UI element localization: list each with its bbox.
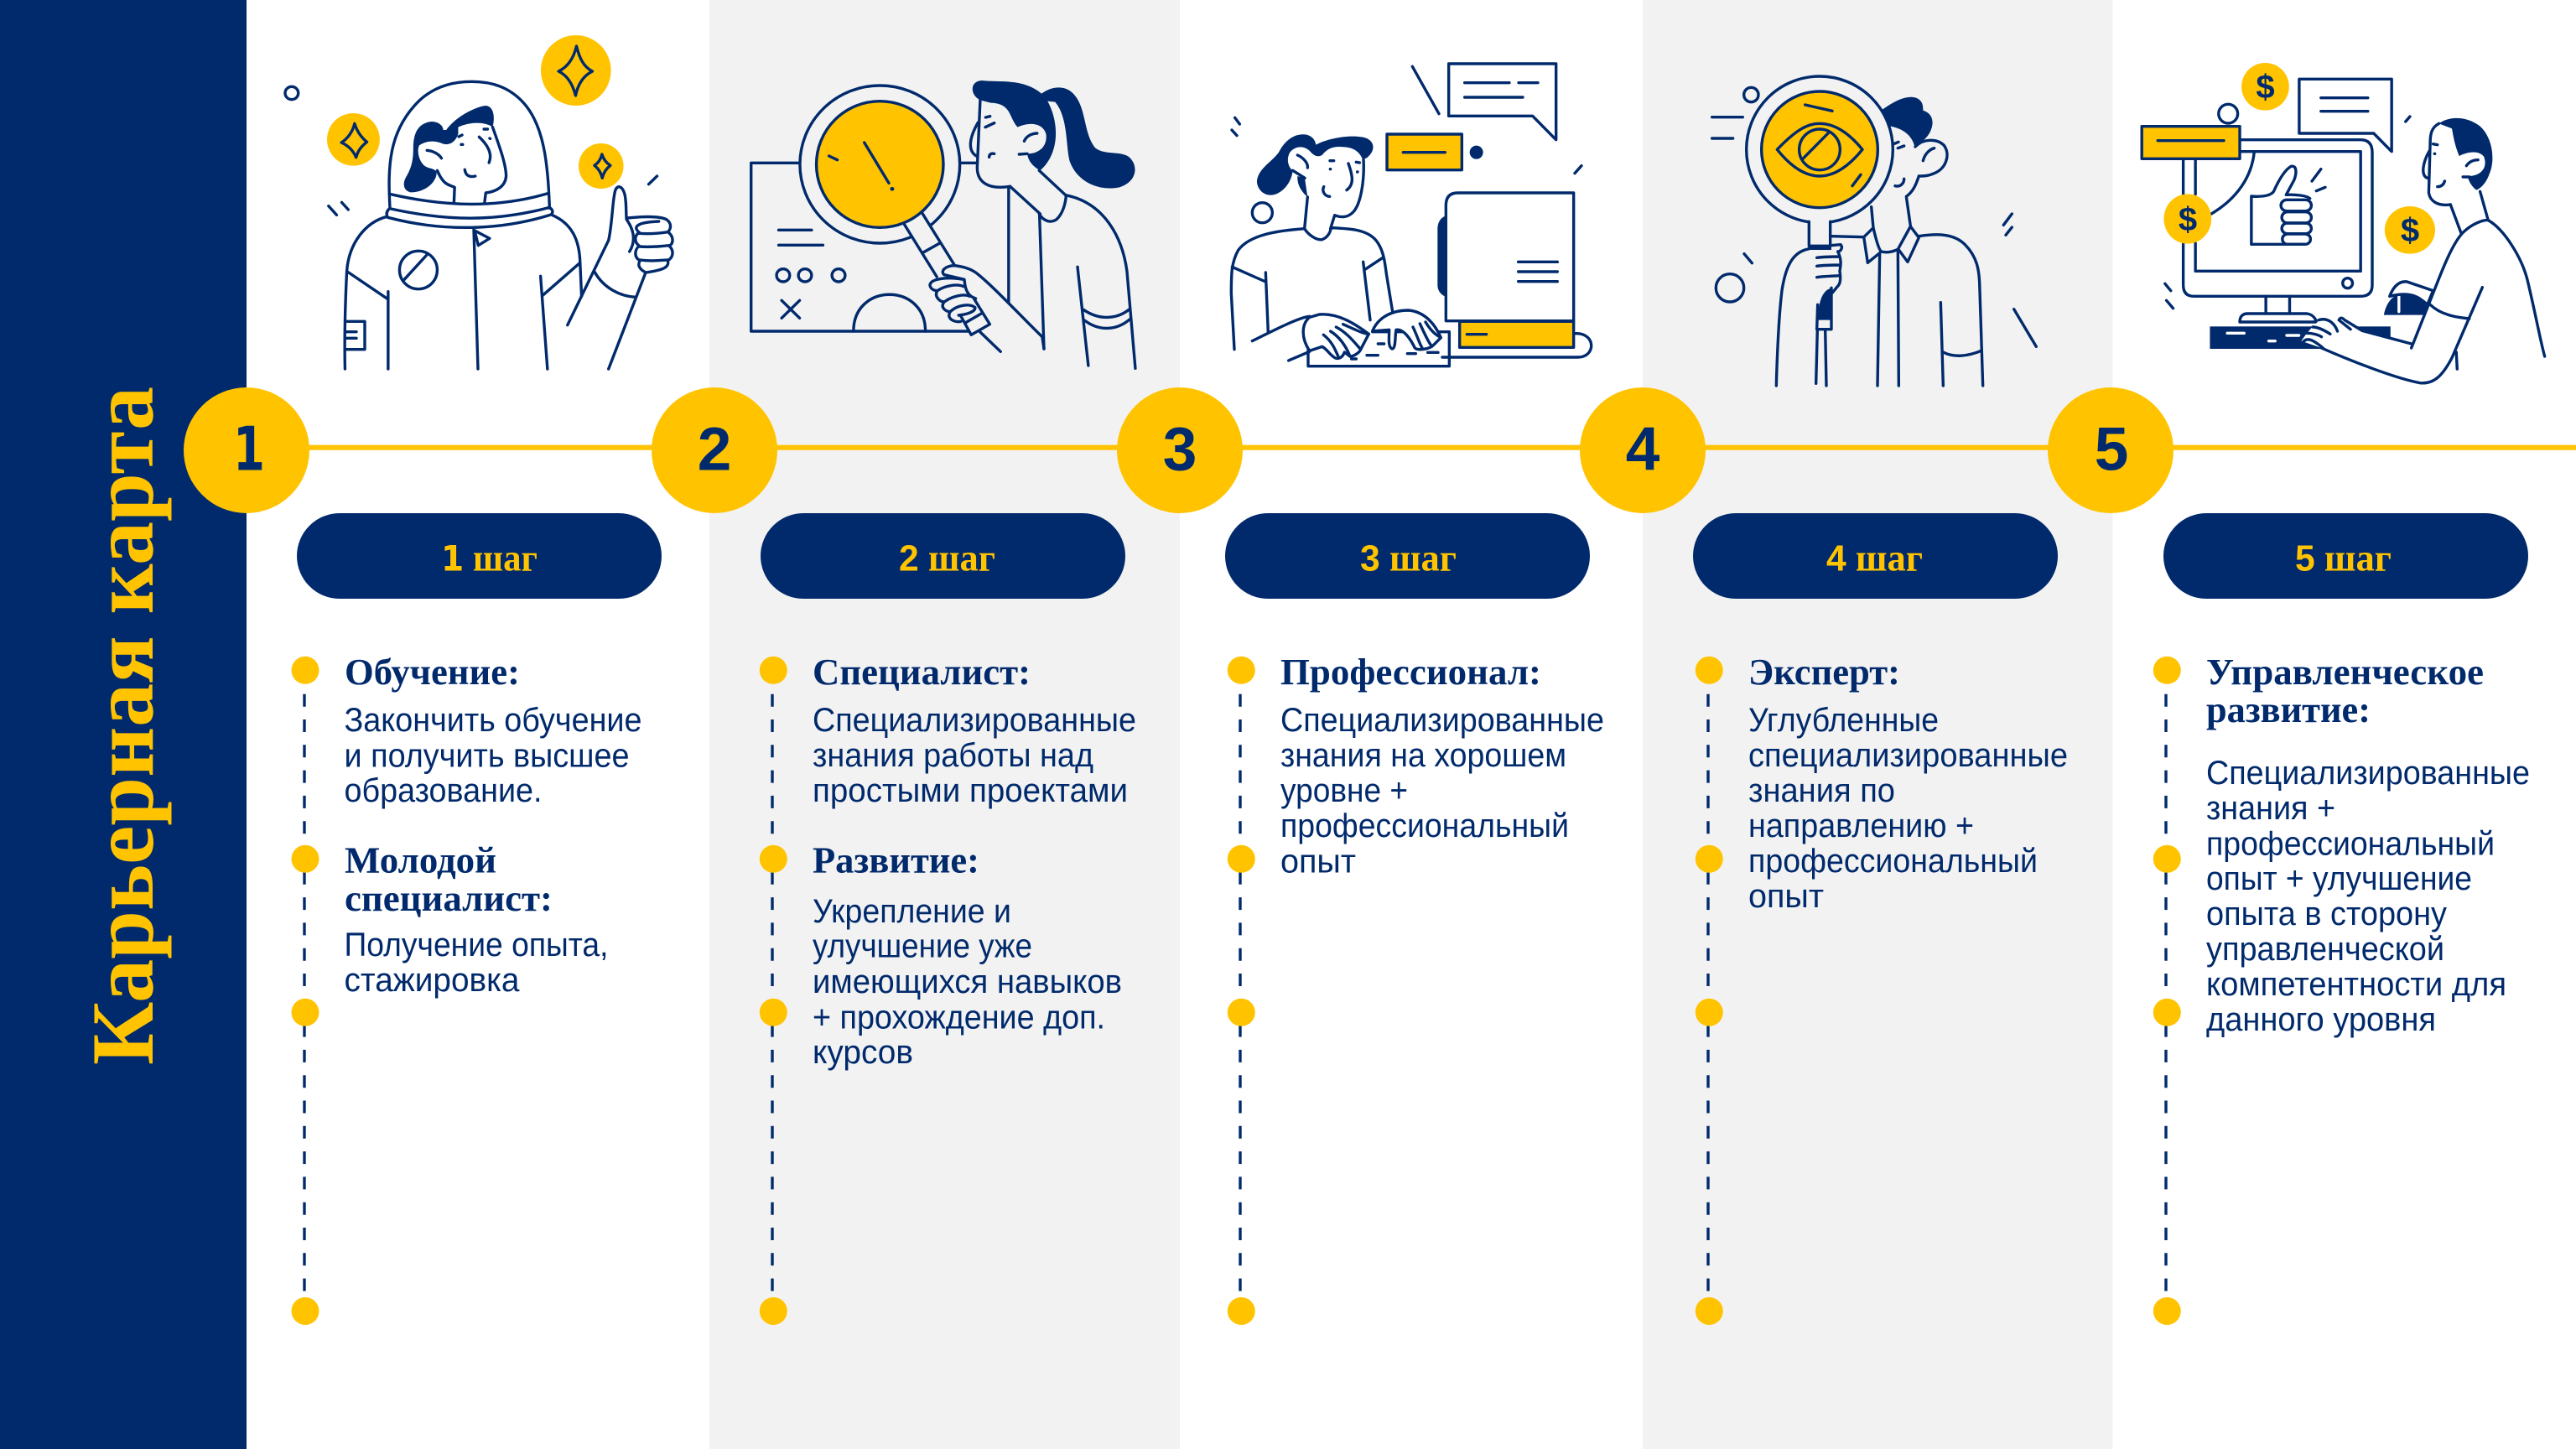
illustration: person at a computer [1231, 64, 1592, 366]
text block: step 5: компетентности для [2206, 966, 2506, 1003]
panel: step 2 background [709, 0, 1180, 1449]
timeline: 1 [233, 414, 265, 485]
text block: step 1: Получение опыта, [344, 927, 609, 963]
text block: step 5 [2206, 652, 2530, 1038]
text block: step 4: знания по [1748, 772, 1895, 809]
text block: step 2: простыми проектами [813, 772, 1128, 809]
step pill 2: 2 шаг [899, 537, 995, 579]
text block: step 2: улучшение уже [813, 928, 1032, 965]
text block: step 5: опыта в сторону [2206, 896, 2447, 932]
text block: step 1 [344, 652, 642, 999]
illustration: man at monitor with money [2142, 63, 2545, 383]
timeline: 5 [2095, 416, 2128, 484]
text block: step 3: Профессионал: [1280, 652, 1541, 693]
step pill 5 [2163, 513, 2528, 599]
illustration: woman with magnifying glass [751, 80, 1135, 368]
text block: step 5: данного уровня [2206, 1001, 2436, 1038]
dotted timeline column 4 [1696, 657, 1723, 1325]
step pill 5: 5 шаг [2295, 537, 2392, 579]
panel: step 4 background [1643, 0, 2113, 1449]
text block: step 3: знания на хорошем [1280, 737, 1566, 774]
timeline [184, 387, 2576, 513]
dotted timeline column 2 [760, 657, 787, 1325]
text block: step 4: направлению + [1748, 808, 1974, 844]
illustration: man looking through magnifier [1712, 76, 2036, 386]
dotted timeline column 5 [2153, 657, 2181, 1325]
text block: step 4: специализированные [1748, 737, 2068, 774]
text block: step 3: опыт [1280, 844, 1356, 880]
step pill 1 [297, 513, 662, 599]
title: Карьерная карта [74, 387, 172, 1065]
text block: step 1: образование. [344, 772, 542, 809]
text block: step 2: курсов [813, 1034, 913, 1071]
text block: step 3 [1280, 652, 1604, 880]
step pill 2 [761, 513, 1125, 599]
text block: step 5: знания + [2206, 790, 2335, 827]
timeline: 3 [1163, 416, 1197, 484]
text block: step 4: Углубленные [1748, 702, 1939, 739]
text block: step 1: Закончить обучение [344, 702, 642, 739]
text block: step 1: стажировка [344, 962, 520, 999]
text block: step 5: Специализированные [2206, 755, 2530, 792]
text block: step 5: опыт + улучшение [2206, 860, 2472, 897]
text block: step 1: и получить высшее [344, 737, 629, 774]
text block: step 3: уровне + [1280, 772, 1408, 809]
text block: step 4: Эксперт: [1748, 652, 1900, 693]
step pill 4: 4 шаг [1826, 537, 1923, 579]
text block: step 5: Управленческое [2206, 652, 2484, 693]
step pill 1: 1 шаг [441, 537, 538, 579]
sidebar panel [0, 0, 247, 1449]
text block: step 2: Специализированные [813, 702, 1136, 739]
text block: step 2: знания работы над [813, 737, 1093, 774]
step pill 4 [1693, 513, 2058, 599]
text block: step 5: управленческой [2206, 931, 2444, 968]
step pill 3: 3 шаг [1360, 537, 1457, 579]
timeline: 2 [698, 416, 731, 484]
text block: step 4: опыт [1748, 878, 1824, 915]
text block: step 4: профессиональный [1748, 843, 2038, 880]
text block: step 2 [813, 652, 1136, 1071]
icon: dollar coin right: $ [2401, 212, 2419, 249]
icon: dollar coin top: $ [2256, 69, 2275, 106]
text block: step 3: Специализированные [1280, 702, 1604, 739]
timeline: 4 [1626, 416, 1660, 484]
text block: step 2: Специалист: [813, 652, 1031, 693]
text block: step 1: Молодой [345, 840, 496, 880]
text block: step 5: развитие: [2206, 689, 2371, 730]
dotted timeline column 1 [292, 657, 319, 1325]
text block: step 2: Укрепление и [813, 893, 1011, 930]
text block: step 3: профессиональный [1280, 808, 1569, 844]
text block: step 4 [1748, 652, 2068, 915]
illustration: astronaut with thumbs up [285, 35, 673, 369]
icon: dollar coin left: $ [2179, 201, 2197, 238]
text block: step 2: Развитие: [813, 840, 979, 881]
text block: step 1: специалист: [345, 878, 553, 919]
text block: step 2: + прохождение доп. [813, 1000, 1105, 1036]
dotted timeline column 3 [1228, 657, 1255, 1325]
step pill 3 [1225, 513, 1590, 599]
text block: step 1: Обучение: [345, 652, 520, 693]
text block: step 5: профессиональный [2206, 825, 2495, 862]
text block: step 2: имеющихся навыков [813, 963, 1122, 1000]
